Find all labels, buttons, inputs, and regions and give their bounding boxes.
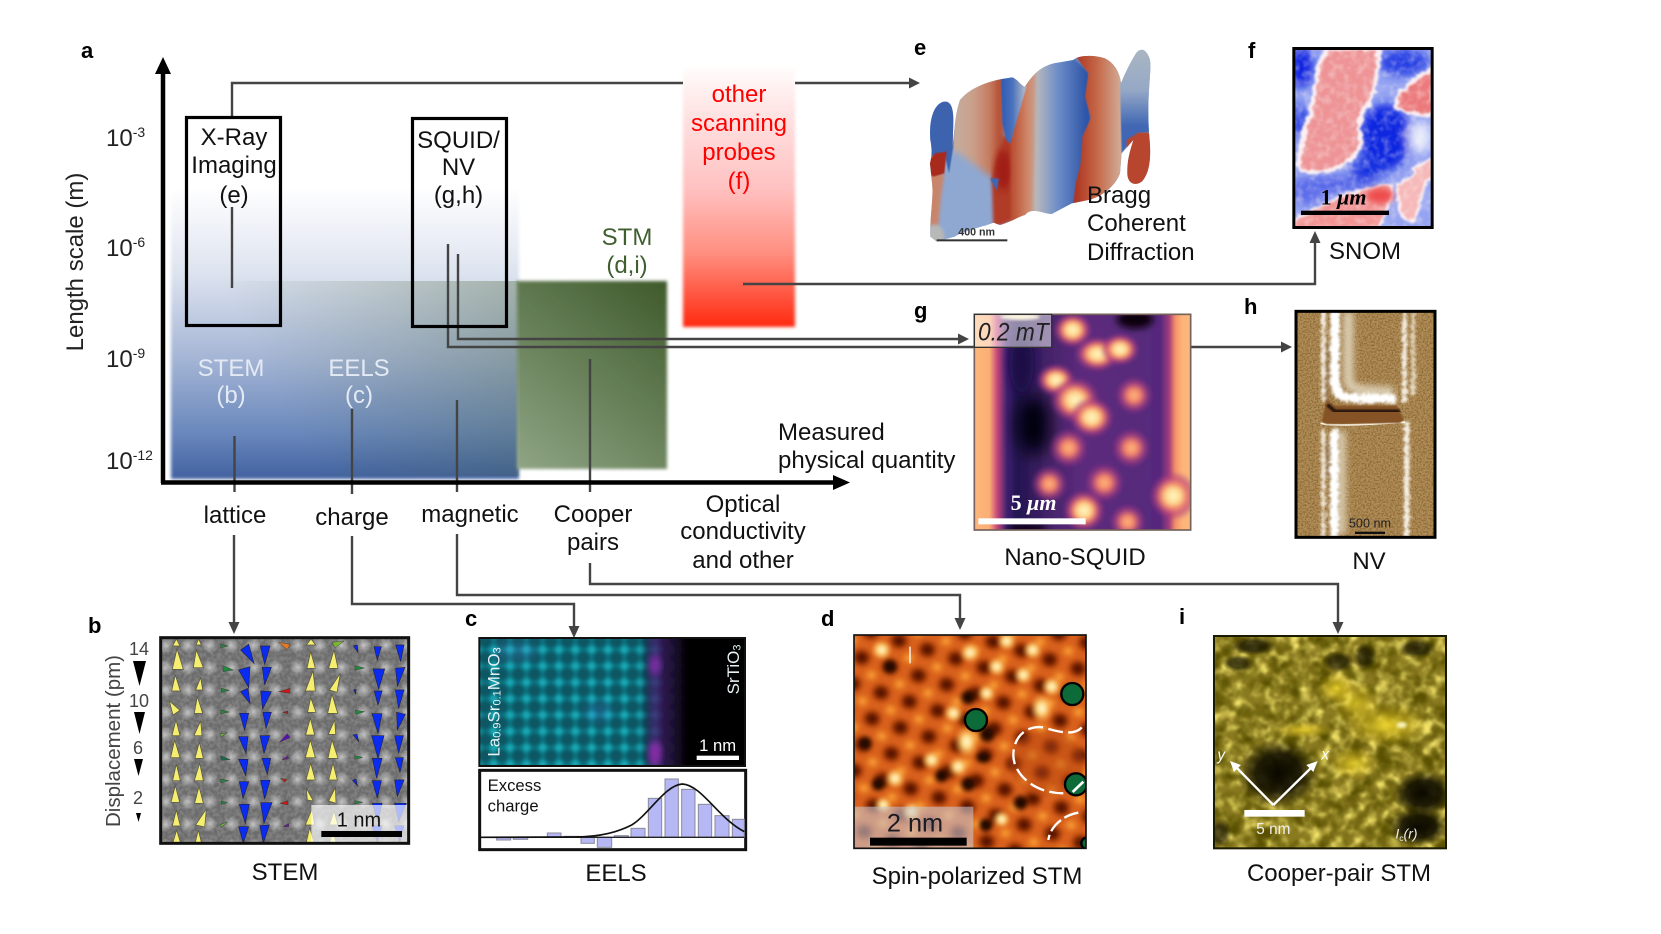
caption: Bragg Coherent Diffraction: Diffraction: [1087, 239, 1195, 266]
panel h: NV image: [1296, 311, 1435, 538]
x category: Cooper pairs: Cooper: [554, 501, 632, 528]
label: STM: (d,i): [606, 252, 648, 279]
label: X-Ray Imaging: Imaging: [191, 152, 277, 179]
axis arrows x y: y: [1216, 747, 1226, 764]
label: STM: STM: [602, 224, 652, 251]
y tick labels: [106, 124, 153, 475]
x category: optical: conductivity: [680, 518, 806, 545]
arrow: Cooper pairs to i: [590, 359, 1338, 624]
scale bar: 1 um: [1301, 185, 1389, 215]
image labels: SrTiO: [724, 651, 743, 694]
panel label f: f: [1248, 38, 1256, 63]
arrow: SQUID to nano-SQUID: [458, 254, 961, 339]
label: EELS: (c): [345, 382, 373, 409]
arrows: small mixed: [220, 641, 365, 827]
arrow: magnetic to d: [457, 400, 960, 620]
x category: magnetic: magnetic: [421, 501, 519, 528]
chart: excess charge histogram: charge: [488, 797, 539, 816]
arrows: yellow: [169, 639, 340, 842]
image labels: [484, 645, 743, 760]
x category: optical: and other: [692, 547, 794, 574]
green defect markers: [965, 683, 1093, 849]
label: other scanning probes: scanning: [691, 110, 787, 137]
region: blue STEM/EELS range: [171, 187, 519, 479]
scale bar: 500 nm: 500 nm: [1349, 516, 1391, 530]
scale bar: 5 um: 5 μm: [1011, 490, 1056, 515]
image labels: 3: [731, 645, 743, 651]
panel d: spin-polarized STM image: [850, 630, 1093, 853]
caption: Spin-polarized STM: Spin-polarized STM: [872, 863, 1082, 890]
vortices: [1031, 315, 1190, 530]
x category: lattice: lattice: [204, 502, 266, 529]
arrow: X-Ray to e: [232, 83, 912, 116]
arrow: lattice to b: [233, 436, 236, 624]
legend: displacement: [102, 639, 149, 827]
panel g: Nano-SQUID image: [970, 310, 1198, 541]
y tick labels: -12: [133, 447, 153, 463]
scale bar: 5 um: [978, 490, 1086, 524]
caption: SNOM: SNOM: [1329, 238, 1401, 265]
label: SQUID/NV: SQUID/: [417, 127, 500, 154]
image labels: MnO: [484, 653, 503, 690]
panel a: method map background: [171, 63, 795, 479]
scale bar: 1 nm: [311, 805, 407, 842]
arrowheads: [228, 78, 1344, 638]
label: other scanning probes: (f): [728, 168, 750, 195]
scale bar: 2 nm: [854, 807, 973, 848]
y axis: [161, 70, 165, 483]
axes: [155, 57, 850, 490]
dark regions: [1208, 637, 1455, 848]
y tick labels: 10: [106, 346, 133, 373]
legend title: Displacement (pm): [102, 655, 125, 827]
label: Ic(r): I: [1395, 825, 1399, 841]
x axis title: physical quantity: [778, 447, 955, 474]
box: SQUID/NV: [412, 118, 506, 326]
panel label d: d: [821, 606, 834, 631]
region: red other scanning probes range: [683, 63, 795, 327]
dark sites: [856, 657, 1031, 834]
panel f: SNOM image: [1290, 47, 1433, 229]
label: other scanning probes: probes: [702, 139, 776, 166]
caption: NV: NV: [1352, 548, 1386, 575]
scale bar: 400 nm: [937, 226, 1007, 241]
legend ticks: 6: [133, 738, 143, 758]
panel label b: b: [88, 613, 101, 638]
method labels: [191, 81, 806, 574]
scale bar: 1 um: 1 μm: [1321, 185, 1366, 210]
caption: STEM: STEM: [252, 859, 318, 886]
caption: EELS: EELS: [585, 860, 647, 887]
axis arrows x y: x: [1320, 746, 1330, 763]
legend ticks: 2: [133, 788, 143, 808]
panel e: Bragg coherent diffraction: [930, 50, 1150, 242]
label: SQUID/NV: NV: [442, 154, 475, 181]
label: X-Ray Imaging: X-Ray: [201, 124, 267, 151]
legend ticks: 14: [129, 639, 149, 659]
y tick labels: -9: [133, 345, 145, 361]
scale bar: 5 nm: [1244, 810, 1305, 838]
chart: excess charge histogram: [480, 770, 746, 850]
caption: Nano-SQUID: Nano-SQUID: [1004, 544, 1146, 571]
scale bar: 1 nm: 1 nm: [337, 810, 381, 832]
x axis: [161, 480, 834, 485]
arrow: other probes to f: [743, 240, 1315, 284]
bright regions: [1273, 672, 1430, 780]
panel label g: g: [914, 298, 927, 323]
y axis title: Length scale (m): [62, 173, 89, 351]
label: Ic(r): (r): [1404, 825, 1418, 841]
label: other scanning probes: other: [712, 81, 766, 108]
panel label i: i: [1179, 604, 1185, 629]
label: X-Ray Imaging: (e): [219, 182, 249, 209]
image labels: Sr: [484, 705, 503, 722]
caption: Cooper-pair STM: Cooper-pair STM: [1247, 860, 1431, 887]
scale bar: 400 nm: 400 nm: [958, 226, 995, 238]
scale bar: 2 nm: 2 nm: [887, 810, 943, 838]
box: X-Ray Imaging: [186, 118, 280, 326]
x axis title: Measured: [778, 419, 885, 446]
y tick labels: 10: [106, 235, 133, 262]
legend ticks: 10: [129, 691, 149, 711]
y tick labels: 10: [106, 448, 133, 475]
panel i: Cooper-pair STM image: [1208, 636, 1455, 848]
region: green overlay band: [171, 281, 519, 476]
image: atomic map: [475, 635, 752, 768]
label: STEM: STEM: [198, 355, 264, 382]
panel b: STEM image: [161, 638, 409, 843]
panel c: EELS: [475, 635, 752, 850]
legend triangles: [133, 661, 146, 822]
label: STEM: (b): [216, 382, 246, 409]
x category: Cooper pairs: pairs: [567, 529, 619, 556]
caption: Bragg Coherent Diffraction: Coherent: [1087, 210, 1186, 237]
arrow: charge to c: [352, 409, 574, 628]
panel label a: a: [81, 38, 94, 63]
y tick labels: -6: [133, 234, 145, 250]
image: domain map: [930, 50, 1150, 242]
x category: charge: charge: [315, 504, 389, 531]
region: green STM range: [517, 281, 667, 469]
dashed domain outlines: [910, 647, 1082, 840]
connector lines and arrows: [232, 83, 1338, 628]
y tick labels: 10: [106, 125, 133, 152]
x category: optical: Optical: [706, 491, 780, 518]
image labels: 0.1: [492, 690, 504, 705]
caption: Bragg Coherent Diffraction: Bragg: [1087, 182, 1151, 209]
legend ticks: [129, 639, 149, 808]
field label: 0.2 mT: 0.2 mT: [978, 319, 1050, 347]
label: SQUID/NV: (g,h): [434, 182, 483, 209]
panel label h: h: [1244, 294, 1257, 319]
arrow: NV to h: [448, 244, 1284, 347]
panel label c: c: [465, 606, 477, 631]
panel label e: e: [914, 35, 926, 60]
y tick labels: -3: [133, 124, 145, 140]
image labels: 3: [492, 647, 504, 653]
label: EELS: EELS: [328, 355, 390, 382]
chart: excess charge histogram: Excess: [488, 776, 541, 795]
image labels: 1 nm: [699, 736, 736, 755]
image labels: 0.9: [492, 722, 504, 738]
bright atoms: [871, 631, 1062, 829]
arrows: blue: [239, 644, 406, 843]
infographic: [66, 42, 1447, 889]
label: Ic(r): c: [1399, 833, 1404, 843]
axis arrows x y: [1216, 746, 1330, 805]
scale bar: 5 nm: 5 nm: [1256, 821, 1290, 838]
image labels: La: [484, 738, 503, 757]
